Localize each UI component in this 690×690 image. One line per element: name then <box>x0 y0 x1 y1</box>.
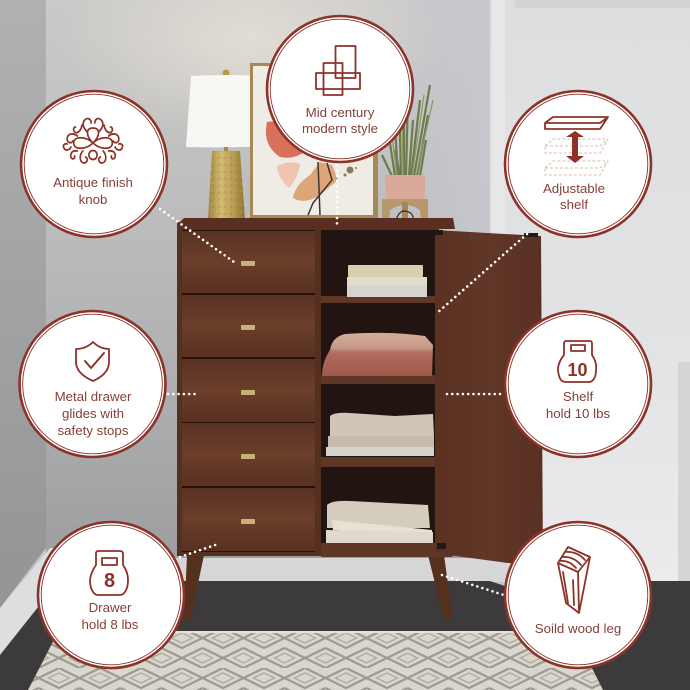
open door <box>435 230 543 566</box>
label: glides with <box>62 406 124 421</box>
pink throw <box>322 333 433 376</box>
curtain <box>490 0 690 590</box>
label: Drawer <box>89 600 132 615</box>
callout: drawer hold 8 lbs <box>37 521 185 669</box>
label: Shelf <box>563 389 593 404</box>
folded towels upper <box>326 413 434 456</box>
icon: shelf moving up and down <box>545 117 608 175</box>
rug <box>28 632 603 690</box>
icon: kettlebell 10: 10 <box>567 360 588 380</box>
label: hold 10 lbs <box>546 406 611 421</box>
label: Mid century <box>306 105 375 120</box>
callout: mid century modern style <box>266 15 414 163</box>
open shelving <box>321 230 435 546</box>
icon: kettlebell 8: 8 <box>104 570 115 592</box>
drawer knobs <box>241 261 255 524</box>
table lamp <box>186 70 269 222</box>
callout: metal drawer glides <box>18 310 166 458</box>
framed wall art <box>250 63 378 219</box>
label: Soild wood leg <box>535 621 621 636</box>
icon: wood block leg <box>558 547 590 613</box>
icon: kettlebell 8 <box>90 551 128 595</box>
callout leader dots <box>160 165 527 595</box>
label: Antique finish <box>53 175 133 190</box>
label: safety stops <box>58 423 129 438</box>
potted plant <box>382 85 433 222</box>
stacked books <box>347 265 427 297</box>
callout: antique finish knob <box>20 90 168 238</box>
label: Metal drawer <box>55 389 132 404</box>
baseboards <box>46 558 516 582</box>
cabinet body <box>177 222 439 556</box>
label: modern style <box>302 121 378 136</box>
icon: overlapping squares <box>316 46 360 95</box>
icon: kettlebell 10 <box>558 341 596 382</box>
label: Adjustable <box>543 181 605 196</box>
label: hold 8 lbs <box>82 617 139 632</box>
floor <box>0 581 690 690</box>
callout: adjustable shelf <box>504 90 652 238</box>
label: shelf <box>560 197 588 212</box>
folded towels lower <box>326 501 433 543</box>
callout: shelf hold 10 lbs <box>504 310 652 458</box>
label: knob <box>79 192 107 207</box>
cabinet legs <box>184 555 204 622</box>
icon: ornamental scroll knob <box>63 119 123 163</box>
drawers <box>182 231 315 551</box>
door hinges <box>435 230 443 235</box>
icon: shield with check <box>76 342 109 381</box>
callout: solid wood leg <box>504 521 652 669</box>
cabinet <box>177 218 543 622</box>
